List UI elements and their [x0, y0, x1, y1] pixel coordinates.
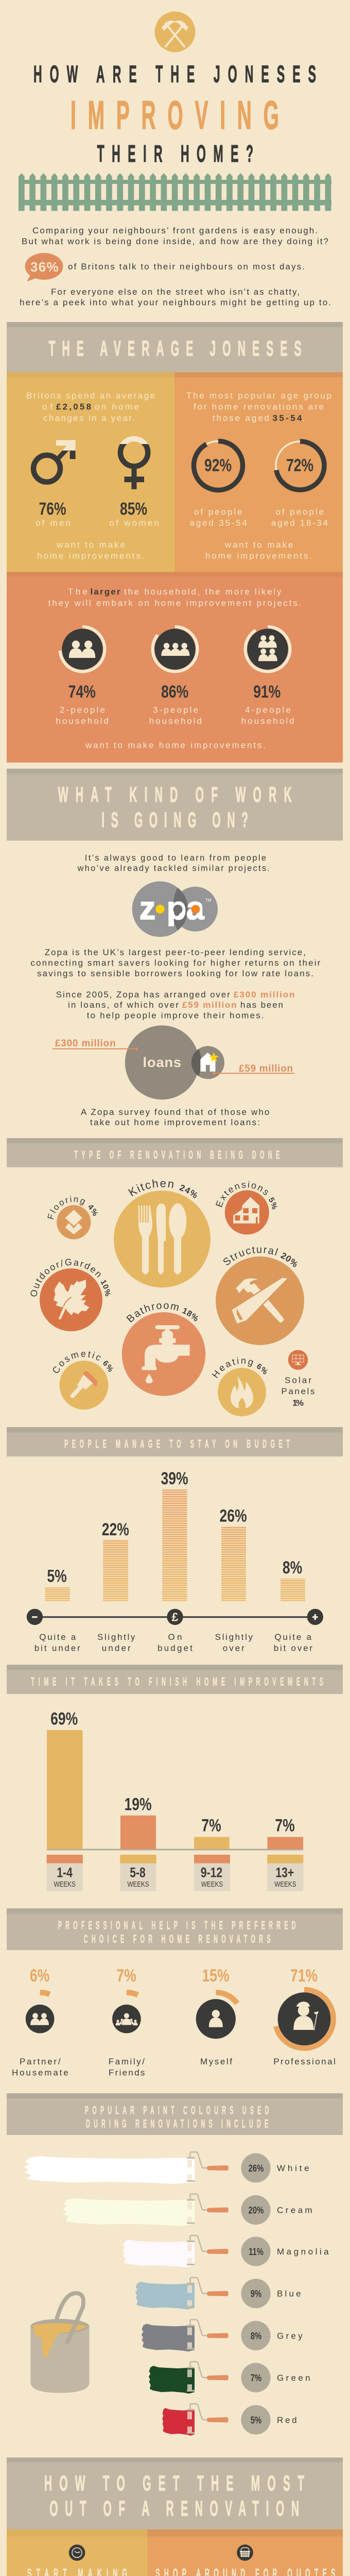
section heading: the average Joneses	[7, 322, 343, 372]
paint row: white 26%: White	[277, 2163, 309, 2173]
text: want to make: home improvements.	[37, 551, 144, 561]
paint row: magnolia 11%	[122, 2235, 329, 2267]
stat: men and women: 85%	[120, 499, 147, 519]
callout: £300 million	[52, 1038, 138, 1050]
text: about Zopa: Since 2005, Zopa has arranged over	[56, 990, 230, 999]
fence illustration	[19, 173, 331, 211]
stats: household percentages: household	[241, 716, 294, 726]
stat: family/friends 7%: 7%	[116, 1966, 136, 1986]
bubble: extensions 5%: Extensions5%	[216, 1181, 277, 1210]
bar: 5-8 weeks 19%: 5-8	[130, 1865, 146, 1880]
stats: household percentages: 4-people	[245, 705, 291, 715]
bubble: flooring 4%: Flooring4%	[47, 1196, 98, 1219]
callout: 36% of Britons	[25, 253, 305, 281]
bar: slightly over 26%: 26%	[219, 1506, 247, 1526]
callout: 36% of Britons: 36%	[30, 259, 59, 275]
stat: myself 15%: 15%	[202, 1966, 230, 1986]
stat: family/friends 7%	[100, 1966, 153, 2077]
callout: £300 million: £300 million	[55, 1038, 116, 1049]
section heading: how to get the most	[7, 2458, 343, 2530]
section heading: the average Joneses: THE AVERAGE JONESES	[48, 337, 302, 361]
text: want to make: home improvements.	[205, 551, 312, 561]
bubble: solar panels 1%: Panels	[281, 1386, 314, 1396]
icon: basket	[237, 2545, 253, 2561]
bubble: structural 20%: Structural20%	[223, 1247, 297, 1267]
bar: 13+ weeks 7%: WEEKS	[274, 1880, 296, 1888]
paint row: blue 9%: Blue	[277, 2289, 301, 2299]
stat: partner/housemate 6%	[12, 1966, 68, 2077]
stats: household percentages: household	[56, 716, 109, 726]
donut: 92%	[194, 441, 243, 490]
text: about Zopa: in loans, of which over	[68, 1000, 179, 1010]
bar: slightly under 22%	[102, 1520, 129, 1601]
paint row: green 7%	[149, 2362, 310, 2394]
stat: myself 15%	[189, 1966, 242, 2066]
intro text: But what work is being done inside, and how are they doing it?	[22, 236, 328, 246]
scale line with minus, pound, plus	[27, 1609, 323, 1625]
callout: £59 million: £59 million	[239, 1063, 293, 1074]
bar: 1-4 weeks 69%: WEEKS	[54, 1880, 76, 1888]
labels: budget scale: bit over	[274, 1643, 312, 1653]
section heading: type of renovation: TYPE OF RENOVATION BEING DONE	[74, 1148, 279, 1161]
logo: Zopa	[132, 882, 218, 937]
labels: budget scale: Slightly	[215, 1632, 253, 1642]
paint row: white 26%	[24, 2152, 309, 2184]
stats: household percentages: 3-people	[153, 705, 198, 715]
bar: 13+ weeks 7%	[267, 1816, 303, 1891]
icon: 2-people household	[60, 626, 105, 672]
bubble: bathroom 18%	[121, 1303, 206, 1396]
stat: partner/housemate 6%: Housemate	[12, 2067, 68, 2077]
labels: budget scale: over	[223, 1643, 244, 1653]
text: about Zopa: connecting smart savers looking for higher returns on their	[30, 958, 321, 968]
text: want to make: want to make	[56, 540, 125, 550]
labels: age groups	[190, 507, 328, 528]
intro text: Comparing your neighbours’ front gardens is easy enough.	[32, 226, 318, 235]
title: IMPROVING	[71, 93, 279, 138]
section heading: professional help: PROFESSIONAL HELP IS THE PREFERRED	[58, 1919, 296, 1931]
text: popular age group	[186, 391, 331, 423]
stats: household percentages: household	[149, 716, 202, 726]
section heading: people stay on budget	[7, 1427, 343, 1456]
section heading: time to finish	[7, 1665, 343, 1694]
bubble: solar panels 1%: 1%	[292, 1398, 304, 1408]
stat: men and women: 76%	[39, 499, 66, 519]
stat: professional 71%: 71%	[290, 1966, 318, 1986]
paint row: magnolia 11%: Magnolia	[277, 2247, 329, 2257]
logo: Zopa: a	[186, 891, 204, 926]
text: want to make	[205, 540, 312, 561]
bubble: kitchen 24%	[114, 1179, 211, 1287]
bar: on budget 39%: 39%	[161, 1469, 188, 1488]
bubble: outdoor/garden 10%: Outdoor/Garden10%	[31, 1259, 111, 1296]
donut: 72%	[276, 442, 324, 490]
section heading: professional help: CHOICE FOR HOME RENOVATORS	[84, 1933, 271, 1945]
text: average spend: of	[42, 402, 52, 412]
paint row: green 7%: Green	[277, 2373, 310, 2383]
icon: house with star	[200, 1052, 219, 1072]
text: about Zopa	[30, 947, 321, 1020]
intro text continued	[20, 287, 331, 307]
stats: household percentages: want to make home improvements.	[85, 740, 266, 750]
bar: 13+ weeks 7%: 13+	[275, 1865, 294, 1880]
intro text	[22, 226, 328, 246]
text: average spend: changes in a year.	[43, 413, 135, 423]
title	[33, 61, 316, 167]
callout: 36% of Britons: of Britons talk to their neighbours on most days.	[68, 262, 305, 272]
section heading: people stay on budget: PEOPLE MANAGE TO STAY ON BUDGET	[64, 1437, 290, 1450]
donut: 72%: 72%	[286, 455, 313, 475]
bubble: heating 6%: Heating6%	[212, 1357, 268, 1378]
bubble: solar panels 1%	[281, 1350, 314, 1408]
intro text continued: here’s a peek into what your neighbours might be getting up to.	[20, 298, 331, 307]
logo: Zopa: p	[167, 891, 186, 926]
panel: shop around for quotes	[147, 2530, 343, 2576]
section heading: paint colours	[7, 2093, 343, 2135]
labels: age groups: aged 35-54	[190, 518, 247, 528]
section heading: how to get the most: OUT OF A RENOVATION	[49, 2497, 299, 2521]
bar: 5-8 weeks 19%: WEEKS	[127, 1880, 149, 1888]
diagram: loans circles	[52, 1025, 294, 1099]
stat: myself 15%: Myself	[200, 2057, 232, 2066]
bar: slightly over 26%	[219, 1506, 247, 1601]
panel: household size	[7, 572, 343, 762]
paint row: grey 8%: 8%	[251, 2331, 261, 2342]
bar: quite a bit over 8%: 8%	[283, 1558, 302, 1578]
text: about Zopa: savings to sensible borrowers looking for low rate loans.	[37, 969, 313, 978]
section heading: paint colours: POPULAR PAINT COLOURS USED	[85, 2104, 269, 2117]
text: about Zopa: £300 million	[234, 990, 294, 999]
paint row: blue 9%: 9%	[251, 2289, 261, 2299]
text: learn from people: It’s always good to learn from people	[85, 853, 266, 862]
paint row: red 5%	[162, 2404, 297, 2436]
paint row: cream 20%	[63, 2194, 312, 2226]
bar: 1-4 weeks 69%: 69%	[50, 1709, 78, 1728]
text: larger households: The	[68, 587, 87, 597]
labels: age groups: of people	[194, 507, 242, 517]
donut: 92%: 92%	[204, 455, 232, 475]
icon: 3-people household	[152, 626, 198, 672]
section heading: time to finish: TIME IT TAKES TO FINISH HOME IMPROVEMENTS	[31, 1675, 323, 1688]
labels: budget scale: Quite a	[39, 1632, 76, 1642]
labels: age groups: of people	[276, 507, 324, 517]
text: average spend: Britons spend an average	[26, 391, 155, 400]
bar: 9-12 weeks 7%: 9-12	[201, 1865, 222, 1880]
stats: household percentages: 91%	[253, 682, 281, 702]
bar: 1-4 weeks 69%: 1-4	[57, 1865, 73, 1880]
bar: slightly under 22%: 22%	[102, 1520, 129, 1539]
paint row: red 5%: Red	[277, 2415, 297, 2425]
stats: household percentages: 86%	[161, 682, 188, 702]
stat: partner/housemate 6%: Partner/	[20, 2057, 61, 2066]
bubble: heating 6%	[212, 1357, 268, 1416]
text: average spend	[26, 391, 155, 423]
icon: clock	[69, 2545, 85, 2561]
text: popular age group: for home renovations are	[194, 402, 324, 412]
labels: budget scale	[34, 1632, 312, 1653]
panel: age groups	[174, 372, 343, 572]
stat: family/friends 7%: Family/	[109, 2057, 145, 2066]
section heading: how to get the most: HOW TO GET THE MOST	[44, 2471, 304, 2496]
text: survey intro: A Zopa survey found that of those who	[81, 1107, 269, 1117]
text: larger households: larger	[91, 587, 120, 597]
paint row: grey 8%: Grey	[277, 2331, 303, 2341]
paint row: magnolia 11%: 11%	[249, 2246, 264, 2257]
text: larger households	[48, 587, 301, 608]
paint row: cream 20%: Cream	[277, 2205, 312, 2215]
stat: professional 71%: Professional	[273, 2057, 336, 2066]
text: popular age group: The most popular age group	[186, 391, 331, 400]
labels: age groups: aged 18-34	[271, 518, 328, 528]
labels: budget scale: Quite a	[274, 1632, 312, 1642]
bubble: kitchen 24%: Kitchen 24%	[128, 1179, 198, 1198]
bubble: bathroom 18%: Bathroom18%	[126, 1303, 199, 1323]
icon: paint bucket	[30, 2293, 90, 2393]
callout: £59 million	[212, 1063, 294, 1075]
bar: 9-12 weeks 7%	[194, 1816, 230, 1891]
title: THEIR HOME?	[97, 140, 253, 167]
bubble: cosmetic 6%: Cosmetic6%	[53, 1351, 113, 1373]
bubble: structural 20%	[216, 1247, 304, 1345]
chart: time to finish bars	[47, 1709, 303, 1891]
bubble: outdoor/garden 10%	[31, 1259, 111, 1331]
text: survey intro	[81, 1107, 269, 1127]
paint row: white 26%: 26%	[249, 2163, 264, 2174]
stat: men and women	[36, 499, 159, 528]
text: average spend: on home	[95, 402, 139, 412]
bubble: cosmetic 6%	[53, 1351, 113, 1410]
section heading: what kind of work: IS GOING ON?	[101, 808, 248, 833]
logo: Zopa: TM	[205, 898, 212, 903]
bubble: solar panels 1%: Solar	[285, 1375, 311, 1385]
logo: Zopa: z	[139, 891, 155, 926]
scale line with minus, pound, plus: £	[172, 1611, 179, 1624]
text: learn from people: who’ve already tackled similar projects.	[77, 864, 270, 873]
icon: crossed hammers badge	[154, 11, 196, 52]
chart: budget bars	[27, 1469, 323, 1653]
text: about Zopa: to help people improve their homes.	[87, 1010, 264, 1020]
labels: budget scale: under	[102, 1643, 131, 1653]
bar: 1-4 weeks 69%	[47, 1709, 83, 1891]
stat: partner/housemate 6%: 6%	[30, 1966, 49, 1986]
icon: male symbol	[33, 440, 76, 482]
paint row: red 5%: 5%	[251, 2415, 261, 2426]
section heading: what kind of work: WHAT KIND OF WORK	[58, 783, 292, 807]
section heading: type of renovation	[7, 1138, 343, 1167]
paint row: grey 8%	[142, 2319, 303, 2351]
text: about Zopa: £59 million	[182, 1000, 237, 1010]
stats: household percentages: 74%	[68, 682, 96, 702]
section heading: paint colours: DURING RENOVATIONS INCLUDE	[86, 2117, 268, 2130]
text: popular age group: those aged	[213, 413, 269, 423]
bubble: flooring 4%	[47, 1196, 98, 1240]
bar: 9-12 weeks 7%: WEEKS	[201, 1880, 223, 1888]
icon: female symbol	[120, 439, 148, 489]
stat: men and women: of men	[36, 518, 71, 528]
text: popular age group: .	[302, 413, 305, 423]
text: about Zopa: Zopa is the UK’s largest peer-to-peer lending service,	[45, 947, 306, 957]
bubble: extensions 5%	[216, 1181, 277, 1234]
text: want to make: want to make	[224, 540, 293, 550]
stats: household percentages: 2-people	[60, 705, 105, 715]
section heading: what kind of work	[7, 769, 343, 841]
paint row: green 7%: 7%	[251, 2372, 261, 2383]
bar: 5-8 weeks 19%: 19%	[124, 1794, 152, 1814]
bar: quite a bit under 5%: 5%	[47, 1566, 67, 1586]
panel: start making plans early	[7, 2530, 147, 2576]
labels: budget scale: bit under	[34, 1643, 80, 1653]
diagram: loans circles: loans	[143, 1055, 181, 1070]
text: popular age group: 35-54	[273, 413, 302, 423]
text: larger households: they will embark on home improvement projects.	[48, 598, 301, 608]
stat: family/friends 7%: Friends	[109, 2067, 145, 2077]
bar: quite a bit over 8%	[281, 1558, 305, 1601]
labels: budget scale: Slightly	[97, 1632, 135, 1642]
paint row: cream 20%: 20%	[249, 2205, 264, 2216]
text: larger households: the household, the more likely	[124, 587, 282, 597]
section heading: professional help	[7, 1908, 343, 1950]
labels: budget scale: budget	[157, 1643, 192, 1653]
labels: budget scale: On	[168, 1632, 182, 1642]
bar: 9-12 weeks 7%: 7%	[201, 1816, 221, 1835]
bar: quite a bit under 5%	[45, 1566, 70, 1601]
text: about Zopa: has been	[240, 1000, 283, 1010]
panel: spend and gender	[7, 372, 174, 572]
stat: professional 71%	[273, 1966, 336, 2066]
bar: on budget 39%	[161, 1469, 188, 1601]
title: HOW ARE THE JONESES	[33, 61, 316, 88]
text: survey intro: take out home improvement loans:	[90, 1117, 260, 1127]
stats: household percentages	[56, 682, 294, 750]
text: average spend: £2,058	[56, 402, 91, 412]
paint row: blue 9%	[135, 2278, 301, 2310]
text: want to make	[37, 540, 144, 561]
bar: 5-8 weeks 19%	[120, 1794, 156, 1891]
stat: men and women: of women	[109, 518, 159, 528]
intro text continued: For everyone else on the street who isn’t as chatty,	[51, 287, 300, 297]
icon: 4-people household	[245, 626, 290, 672]
text: learn from people	[77, 853, 270, 873]
bar: 13+ weeks 7%: 7%	[275, 1816, 295, 1835]
chart: renovation bubbles	[31, 1179, 314, 1416]
